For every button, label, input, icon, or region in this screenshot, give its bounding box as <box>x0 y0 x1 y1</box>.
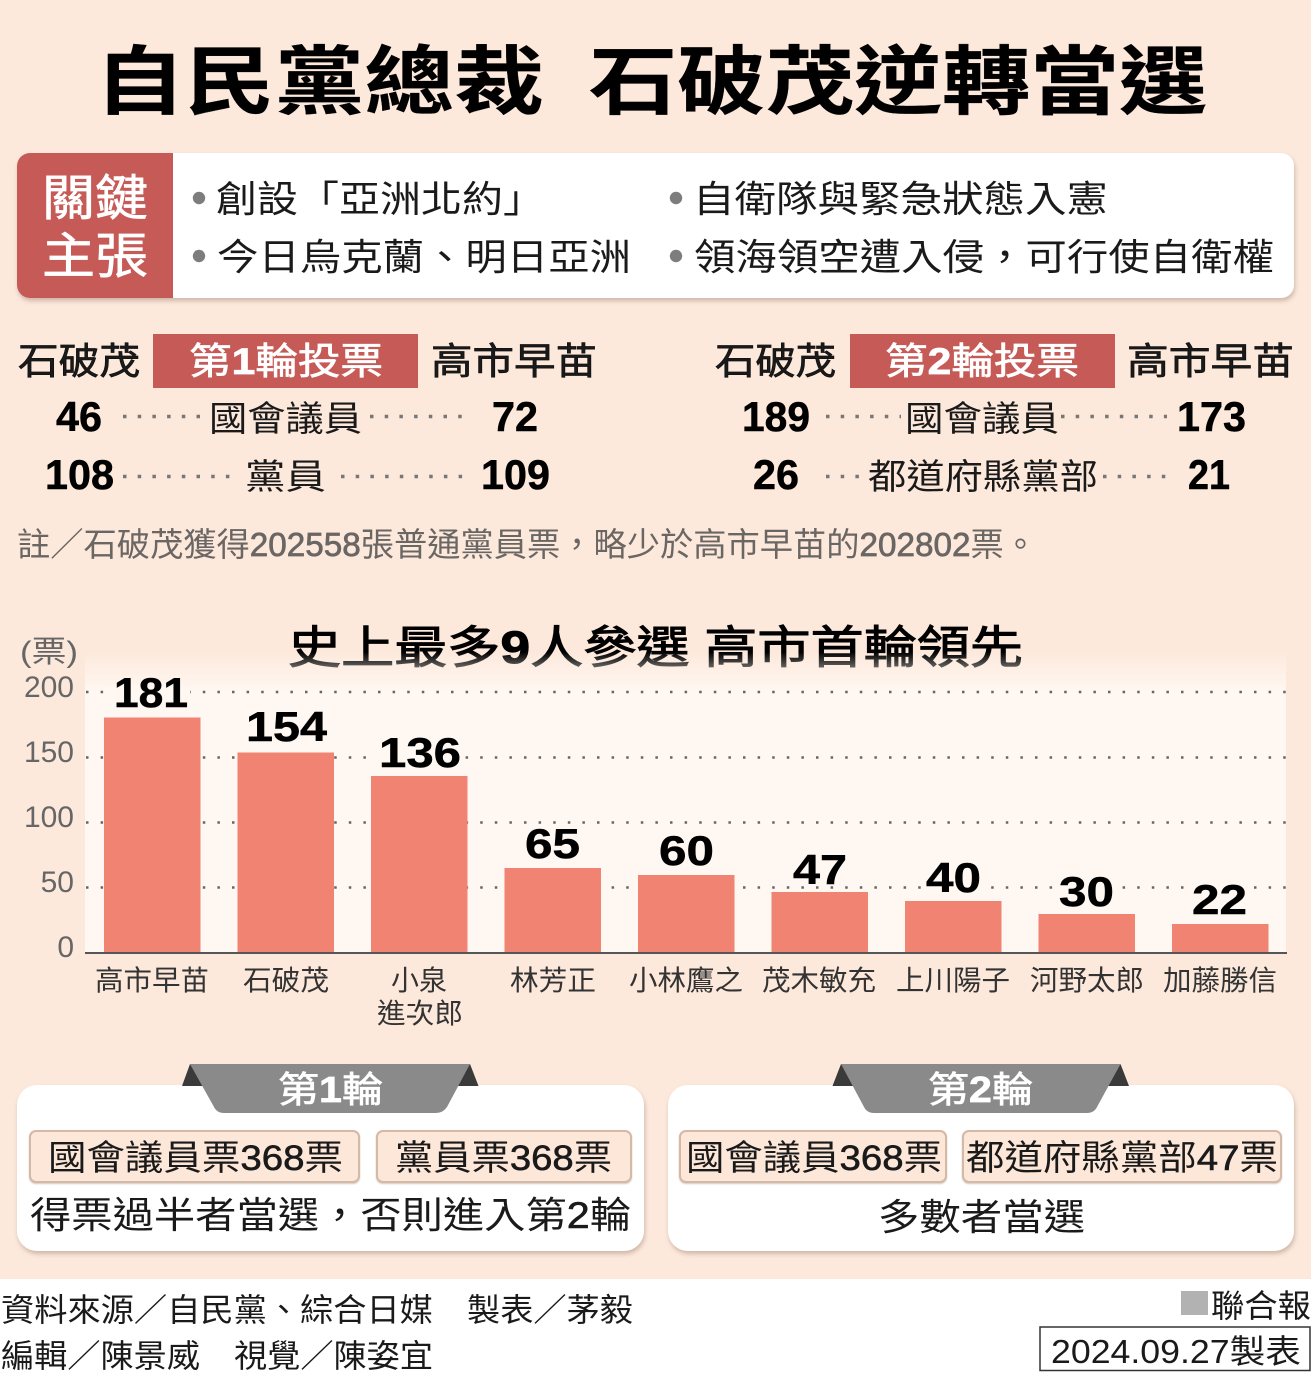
text block: position list left <box>193 179 631 278</box>
panel: round 2 votes: 高市早苗 <box>1127 341 1294 382</box>
panel: round 1 votes: 國會議員 <box>209 400 362 439</box>
panel: round 1 votes: 第1輪投票 <box>189 341 383 382</box>
axis labels: 150 <box>24 736 74 769</box>
text block: position list left: 今日烏克蘭、明日亞洲 <box>217 237 631 278</box>
candidate names: 進次郎 <box>377 998 463 1029</box>
box: lawmakers votes: 國會議員 368票 <box>686 1139 942 1178</box>
panel: round 1 votes: 72 <box>492 393 538 440</box>
title <box>95 40 1207 124</box>
axis labels: 100 <box>24 801 74 834</box>
candidate names: 林芳正 <box>510 965 596 996</box>
candidate names: 加藤勝信 <box>1163 965 1277 996</box>
heading: key positions label <box>42 172 148 284</box>
panel: round 2 votes <box>715 334 1294 498</box>
candidate names: 上川陽子 <box>896 965 1010 996</box>
value labels: 22 <box>1192 876 1247 923</box>
panel: round 2 votes: 173 <box>1177 393 1246 440</box>
text block: credits: 視覺／陳姿宜 <box>234 1338 433 1374</box>
panel: round 2 votes: 都道府縣黨部 <box>868 458 1098 497</box>
axis labels: 0 <box>57 931 74 964</box>
value labels: 30 <box>1059 868 1114 915</box>
text block: credits: 資料來源／自民黨、綜合日媒 <box>1 1292 433 1328</box>
value labels: 65 <box>525 820 580 867</box>
candidate names: 小泉 <box>391 965 447 996</box>
ribbon: round 1 <box>182 1064 478 1113</box>
panel: round 2 rules <box>668 1064 1294 1251</box>
ribbon: round 1: 第1輪 <box>278 1069 383 1110</box>
panel: round 2 votes: 189 <box>742 393 810 440</box>
box: party member votes <box>377 1131 631 1182</box>
text block: credits <box>1 1292 633 1374</box>
value labels: 181 <box>114 669 188 716</box>
panel: round 1 votes: 黨員 <box>245 458 326 497</box>
value labels: 136 <box>379 729 461 776</box>
panel: round 2 votes: 21 <box>1188 451 1230 498</box>
text block: round 1 rule: 得票過半者當選，否則進入第 2輪 <box>30 1195 631 1236</box>
value labels: 40 <box>926 854 981 901</box>
candidate names: 河野太郎 <box>1030 965 1144 996</box>
panel: round 1 votes: 高市早苗 <box>431 341 597 382</box>
box: lawmakers votes: 國會議員票 368票 <box>48 1139 343 1178</box>
value labels: 47 <box>793 846 847 893</box>
panel: round 1 votes: 石破茂 <box>18 341 140 382</box>
candidate names: 石破茂 <box>243 965 329 996</box>
text block: round 2 rule: 多數者當選 <box>878 1197 1085 1238</box>
panel: round 2 votes: 第2輪投票 <box>885 341 1079 382</box>
panel: round 2 votes: 石破茂 <box>715 341 836 382</box>
box: lawmakers votes <box>30 1131 359 1182</box>
axis labels <box>20 636 78 964</box>
logo: United Daily News: 聯合報 <box>1211 1288 1311 1324</box>
panel: round 1 rules <box>17 1064 644 1251</box>
box: party member votes: 黨員票 368票 <box>395 1139 612 1178</box>
heading: key positions label: 主張 <box>42 230 148 284</box>
title: 自民黨總裁 <box>95 40 544 124</box>
text block: credits: 編輯／陳景威 <box>1 1338 200 1374</box>
axis labels: (票) <box>20 636 78 669</box>
panel: round 2 votes: 國會議員 <box>905 400 1059 439</box>
bar chart: first round votes <box>20 636 1287 1029</box>
text block: position list right: 自衛隊與緊急狀態入憲 <box>693 179 1108 220</box>
bars <box>104 718 1268 952</box>
chart heading: 史上最多 9人參選 高市首輪領先 <box>288 622 1023 673</box>
text block: footnote: 註／石破茂獲得202558張普通黨員票，略少於高市早苗的202802票。 <box>17 526 1037 563</box>
title: 石破茂逆轉當選 <box>589 40 1207 124</box>
axis labels: 200 <box>24 671 74 704</box>
ribbon: round 2: 第2輪 <box>928 1069 1033 1110</box>
panel: key positions <box>17 153 1294 298</box>
panel: round 1 votes <box>18 334 597 498</box>
candidate names: 茂木敏充 <box>762 965 876 996</box>
value labels <box>114 669 1247 923</box>
heading: key positions label: 關鍵 <box>42 172 148 226</box>
candidate names: 高市早苗 <box>95 965 209 996</box>
candidate names: 小林鷹之 <box>629 965 743 996</box>
text block: position list right <box>670 179 1274 278</box>
text block: position list left: 創設「亞洲北約」 <box>216 179 544 220</box>
panel: round 1 votes: 109 <box>481 451 550 498</box>
value labels: 60 <box>659 827 714 874</box>
value labels: 154 <box>246 703 328 750</box>
panel: round 1 votes: 46 <box>56 393 102 440</box>
panel: round 2 votes: 26 <box>753 451 799 498</box>
text block: position list right: 領海領空遭入侵，可行使自衛權 <box>694 237 1274 278</box>
panel: round 1 votes: 108 <box>45 451 114 498</box>
text block: credits: 製表／茅毅 <box>467 1292 633 1328</box>
date stamp: 2024.09.27製表 <box>1051 1333 1301 1370</box>
box: prefectural votes: 都道府縣黨部 47票 <box>966 1139 1278 1178</box>
ribbon: round 2 <box>832 1064 1129 1113</box>
axis labels: 50 <box>41 866 74 899</box>
candidate names <box>95 965 1277 1029</box>
